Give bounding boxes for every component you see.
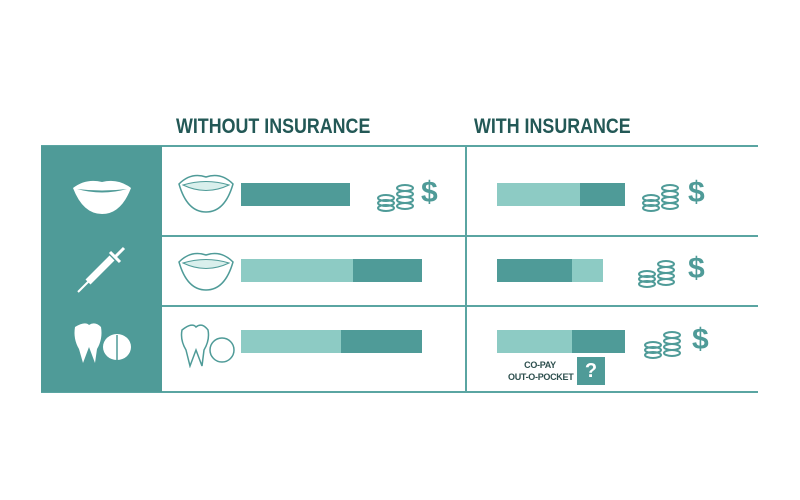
callout: co-pay out-of-pocket: OUT-O-POCKET [508, 372, 573, 382]
title: with insurance: WITH INSURANCE [474, 115, 631, 138]
callout: co-pay out-of-pocket [508, 357, 605, 385]
icon: coins and dollar (rows) [377, 176, 438, 212]
bar chart: without insurance [241, 183, 422, 353]
icon: syringe [77, 247, 125, 293]
grid lines [41, 145, 758, 147]
icon: tooth and brain [74, 323, 131, 363]
row icons: outline mouths/tooth [178, 174, 234, 213]
text: $ [692, 323, 709, 356]
panel: category icons [41, 146, 162, 392]
bar chart: with insurance [497, 183, 625, 353]
icon: coins and dollar (rows): $ [421, 176, 438, 209]
title: without insurance: WITHOUT INSURANCE [176, 115, 370, 138]
icon: mouth [73, 180, 131, 214]
callout: co-pay out-of-pocket: CO-PAY [524, 360, 556, 370]
text: $ [688, 252, 705, 285]
text: $ [688, 176, 705, 209]
callout: co-pay out-of-pocket: ? [585, 360, 597, 382]
